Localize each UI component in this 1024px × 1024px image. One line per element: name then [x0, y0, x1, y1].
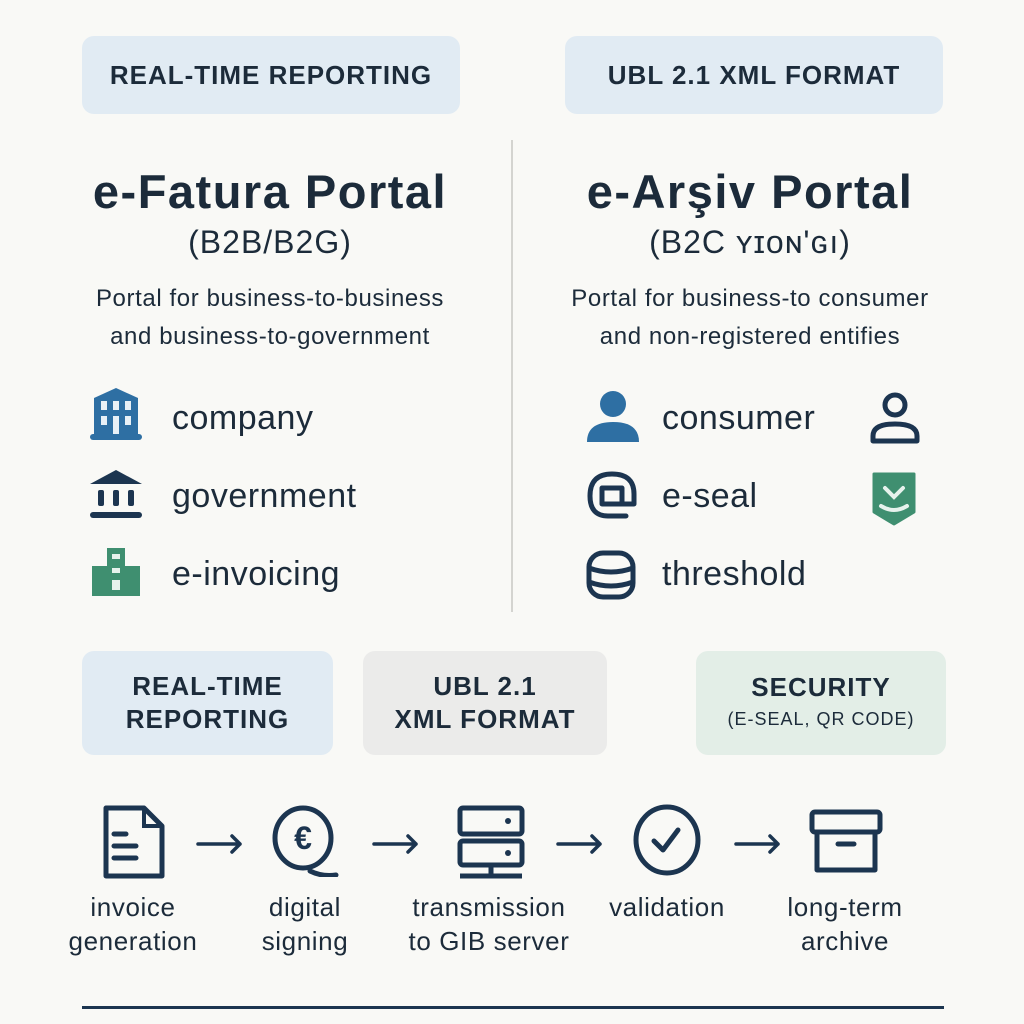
icon: consumer: [587, 391, 639, 442]
label: digital signing: signing: [262, 926, 348, 956]
icon: database: [586, 550, 636, 600]
process flow: [69, 804, 903, 956]
icon: e-seal @: [588, 472, 636, 518]
panel: e-Fatura: [90, 165, 447, 596]
pill: UBL 2.1 bottom: XML FORMAT: [395, 704, 575, 734]
pill: UBL 2.1 bottom: UBL 2.1: [433, 671, 537, 701]
icon: euro signing: [272, 806, 338, 877]
description: and business-to-government: [110, 323, 430, 350]
arrow: [734, 834, 780, 854]
icon: server: [458, 806, 524, 878]
label: transmission: transmission: [412, 892, 566, 922]
pill: security: [696, 651, 946, 755]
arrow: [556, 834, 602, 854]
pill: UBL 2.1 XML format top: [565, 36, 943, 114]
label: transmission: [408, 892, 569, 956]
label: long-term archive: [787, 892, 903, 956]
label: long-term archive: long-term: [787, 892, 903, 922]
heading: e-Fatura Portal: e-Fatura Portal: [93, 165, 447, 218]
arrow: [196, 834, 242, 854]
label: invoice generation: invoice: [90, 892, 176, 922]
item: e-seal: e-seal: [662, 477, 758, 515]
panel: e-Arsiv: [571, 165, 929, 600]
icon: document: [104, 806, 164, 878]
icon: green shield check: [872, 472, 916, 526]
pill: real-time reporting bottom: REAL-TIME: [132, 671, 283, 701]
subheading: B2C: (B2C ʏɪᴏɴ'ɢı): [649, 224, 851, 260]
icon: euro signing: €: [294, 820, 312, 856]
arrow: [372, 834, 418, 854]
label: digital signing: digital: [269, 892, 341, 922]
item: threshold: threshold: [662, 555, 806, 593]
pill: UBL 2.1 bottom: [363, 651, 607, 755]
pill: real-time reporting bottom: [82, 651, 333, 755]
pill: security: (E-SEAL, QR CODE): [727, 709, 915, 729]
icon: check circle: [634, 804, 700, 876]
pill: UBL 2.1 XML format top: UBL 2.1 XML FORMAT: [608, 60, 900, 90]
heading: e-Arsiv Portal: e-Arşiv Portal: [587, 165, 913, 218]
description: Portal for business-to-business: [96, 285, 444, 312]
pill: real-time reporting top: REAL-TIME REPORTING: [110, 60, 432, 90]
description: [571, 285, 929, 350]
label: invoice generation: generation: [69, 926, 197, 956]
item: government: government: [172, 477, 357, 515]
label: digital signing: [262, 892, 348, 956]
subheading: B2B/B2G: (B2B/B2G): [188, 224, 352, 260]
icon: company: [90, 388, 142, 440]
icon: e-invoicing: [92, 548, 140, 596]
description: Portal for business-to consumer: [571, 285, 929, 312]
icon: user outline: [870, 392, 920, 444]
label: transmission: to GIB server: [409, 926, 569, 956]
label: invoice generation: [69, 892, 197, 956]
item: consumer: consumer: [662, 399, 815, 437]
icon: archive box: [810, 810, 882, 872]
icon: government: [90, 470, 142, 518]
description: [96, 285, 444, 350]
pill: real-time reporting top: [82, 36, 460, 114]
label: validation: validation: [609, 892, 725, 922]
description: and non-registered entifies: [600, 323, 900, 350]
label: long-term archive: archive: [801, 926, 889, 956]
item: company: company: [172, 399, 313, 437]
pill: real-time reporting bottom: REPORTING: [126, 704, 289, 734]
item: e-invoicing: e-invoicing: [172, 555, 340, 593]
pill: security: SECURITY: [751, 672, 891, 702]
